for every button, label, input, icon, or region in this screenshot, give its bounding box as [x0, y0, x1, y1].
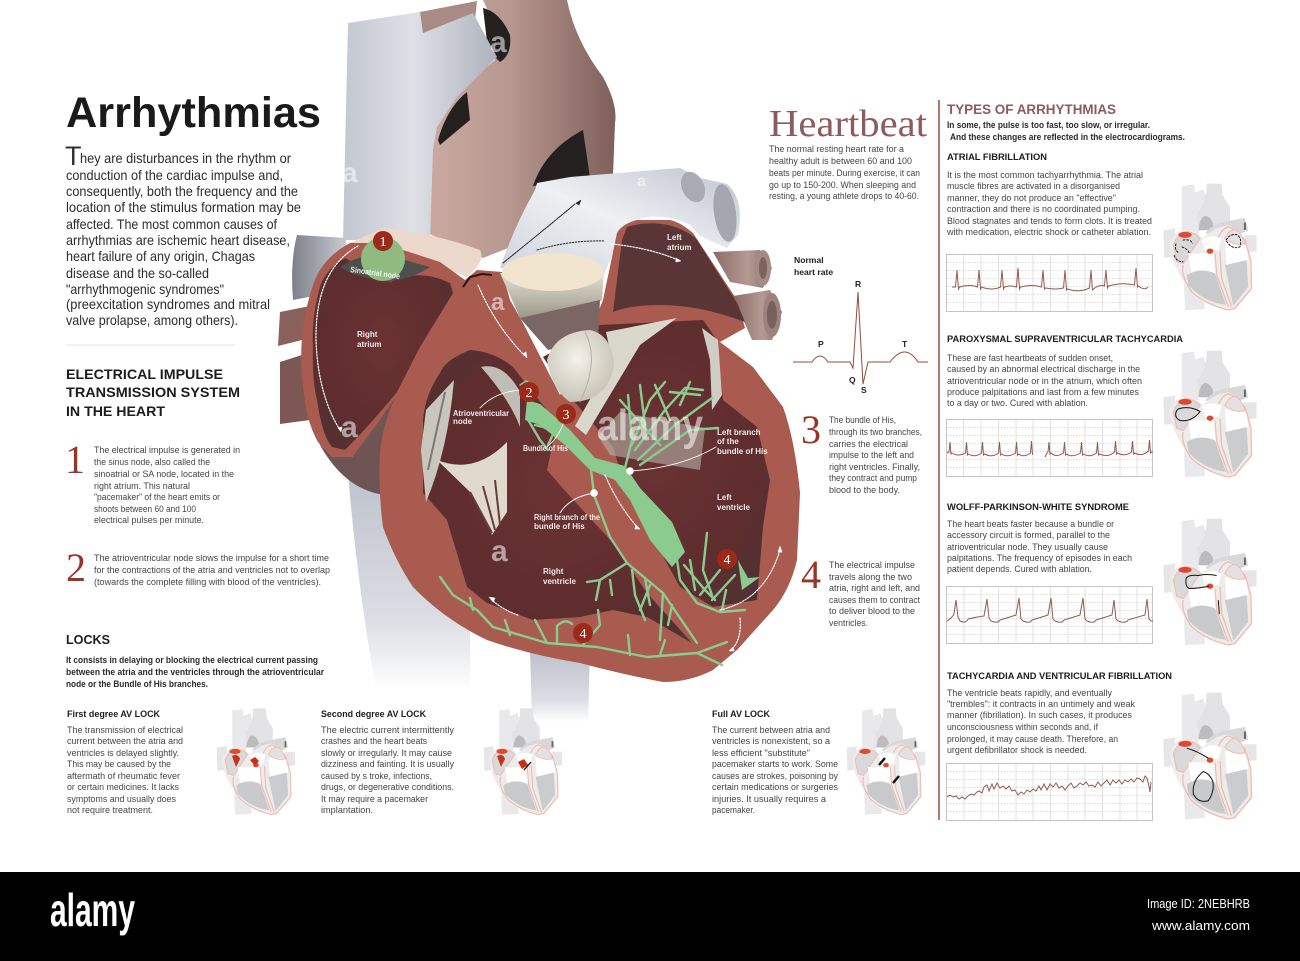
locks heading: LOCKS [66, 632, 110, 647]
heartbeat text: resting, a young athlete drops to 40-60. [769, 191, 919, 201]
right ventricle chamber [423, 350, 692, 643]
label: sinoatrial node: Sinoatrial node [350, 265, 401, 281]
intro text: consequently, both the frequency and the [66, 184, 298, 199]
step 3: through its two branches, [829, 427, 922, 437]
types intro: In some, the pulse is too fast, too slow, or irregular. [947, 120, 1150, 130]
intro text: heart failure of any origin, Chagas [66, 249, 255, 264]
step 1: "pacemaker" of the heart emits or [94, 492, 220, 502]
full AV lock: certain medications or surgeries [712, 782, 838, 792]
intro text: arrhythmias are ischemic heart disease, [66, 233, 290, 248]
heading: atrial fibrillation: ATRIAL FIBRILLATION [947, 151, 1047, 162]
chamber labels: Atrioventricular [453, 409, 509, 418]
left vessels [278, 235, 346, 424]
text: WPW: The heart beats faster because a bundle or [947, 519, 1114, 529]
chamber labels: Left branch [717, 428, 761, 437]
text: WPW: accessory circuit is formed, parallel to the [947, 530, 1110, 540]
text: atrial fibrillation: manner, they do not produce an "effective" [947, 193, 1116, 203]
watermarks: a [341, 411, 358, 444]
step 4: causes them to contract [829, 595, 920, 605]
descending aorta [530, 650, 590, 722]
text: WPW [947, 519, 1132, 574]
types intro [947, 120, 1185, 142]
second degree AV lock: drugs, or degenerative conditions. [321, 782, 454, 792]
number badges: 4 [724, 553, 730, 568]
step 3: The bundle of His, [829, 415, 896, 425]
intro text: disease and the so-called [66, 266, 209, 281]
second degree AV lock: implantation. [321, 805, 373, 815]
icon: tachycardia heart [1164, 692, 1256, 820]
step 2: The atrioventricular node slows the impulse for a short time [94, 553, 329, 563]
full AV lock: Full AV LOCK [712, 708, 770, 719]
footer bar [0, 872, 1300, 961]
LV upper pale muscle [575, 318, 722, 470]
icon: full lock heart [847, 708, 925, 815]
normal ECG chart: R [855, 279, 861, 289]
watermarks: a [342, 157, 358, 188]
heartbeat text: beats per minute. During exercise, it can [769, 168, 920, 178]
text: atrial fibrillation: with medication, electric shock or catheter ablation. [946, 227, 1151, 237]
intro text: "arrhythmogenic syndromes" [66, 282, 224, 297]
normal ECG chart: S [861, 385, 867, 395]
number badges: 2 [526, 386, 532, 401]
text: paroxysmal: caused by an abnormal electrical discharge in the [947, 364, 1140, 374]
intro text: valve prolapse, among others). [66, 313, 238, 328]
chamber labels: bundle of His [534, 522, 585, 531]
brown aorta [425, 0, 616, 258]
step 4: to deliver blood to the [829, 606, 915, 616]
heading: paroxysmal: PAROXYSMAL SUPRAVENTRICULAR TACHYCARDIA [947, 333, 1183, 344]
dark pockets [438, 8, 590, 186]
normal ECG chart: heart rate [794, 267, 833, 277]
first degree AV lock: First degree AV LOCK [67, 708, 160, 719]
chamber labels: of the [717, 437, 739, 446]
chamber labels: ventricle [543, 577, 576, 586]
pulmonary arch [500, 168, 740, 275]
watermarks: a [490, 26, 507, 59]
watermarks: a [637, 173, 646, 190]
icon: second degree heart [484, 708, 562, 815]
step 4 [801, 552, 920, 628]
watermarks: a [491, 535, 508, 568]
text: WPW: patient depends. Cured with ablation. [947, 564, 1092, 574]
first degree AV lock: ventricles is delayed slightly. [67, 748, 179, 758]
text: paroxysmal: atrioventricular node or in the atrium, which often [947, 376, 1142, 386]
title: Arrhythmias [66, 89, 321, 137]
step 1: electrical pulses per minute. [94, 515, 204, 525]
chamber labels [357, 233, 768, 586]
full AV lock: pacemaker starts to work. Some [712, 759, 838, 769]
number badges: 4 [580, 627, 586, 642]
text: atrial fibrillation: contraction and there is no coordinated pumping. [947, 204, 1140, 214]
heading: tachycardia: TACHYCARDIA AND VENTRICULAR FIBRILLATION [947, 670, 1172, 681]
image id: Image ID: 2NEBHRB [1147, 896, 1250, 911]
step 3: they contract and pump [829, 473, 917, 483]
chart: tachycardia ECG [946, 763, 1153, 821]
step 4: travels along the two [829, 572, 912, 582]
first degree AV lock: current between the atria and [67, 736, 183, 746]
chamber labels: atrium [667, 243, 691, 252]
conduction network [440, 381, 760, 665]
types heading: TYPES OF ARRHYTHMIAS [947, 102, 1116, 117]
brown patch behind vena cava [420, 1, 477, 36]
anatomical heart illustration [278, 0, 800, 722]
panel: tachycardia and ventricular fibrillation [946, 670, 1257, 821]
arrows [316, 200, 782, 651]
panel: paroxysmal supraventricular tachycardia [946, 333, 1257, 477]
alamy logo: alamy [50, 884, 135, 936]
locks intro [66, 655, 324, 689]
chamber labels: Left [667, 233, 682, 242]
intro text: (preexcitation syndromes and mitral [66, 297, 270, 312]
panel: wolff-parkinson-white [946, 501, 1257, 645]
intro text: hey are disturbances in the rhythm or [80, 151, 291, 166]
text: paroxysmal: produce palpitations and last from a few minutes [947, 387, 1139, 397]
normal ECG chart: P [818, 339, 824, 349]
full AV lock: ventricles is nonexistent, so a [712, 736, 830, 746]
text: tachycardia: manner (fibrillation). In such cases, it produces [947, 710, 1132, 720]
heading: WPW: WOLFF-PARKINSON-WHITE SYNDROME [947, 501, 1129, 512]
heading: electrical impulse: ELECTRICAL IMPULSE [66, 366, 223, 382]
icon: paroxysmal heart [1164, 350, 1256, 478]
watermarks: alamy [597, 401, 703, 450]
full AV lock: causes are strokes, poisoning by [712, 771, 838, 781]
chamber labels: atrium [357, 340, 381, 349]
text: tachycardia [947, 688, 1135, 755]
aorta section [500, 253, 604, 350]
vena cava lower [347, 460, 470, 690]
chamber labels: ventricle [717, 503, 750, 512]
step 2 [66, 545, 330, 590]
second degree AV lock: Second degree AV LOCK [321, 708, 426, 719]
step 1: The electrical impulse is generated in [94, 445, 240, 455]
first degree AV lock: aftermath of rheumatic fever [67, 771, 180, 781]
first degree AV lock: This may be caused by the [67, 759, 171, 769]
heartbeat text: healthy adult is between 60 and 100 [769, 156, 912, 166]
heartbeat text: The normal resting heart rate for a [769, 144, 904, 154]
chamber labels: node [453, 417, 473, 426]
second degree AV lock: dizziness and fainting. It is usually [321, 759, 454, 769]
step 2: 2 [66, 545, 86, 590]
locks intro: between the atria and the ventricles through the atrioventricular [66, 667, 324, 677]
step 4: ventricles. [829, 618, 868, 628]
intro text [65, 141, 301, 328]
chamber labels: Right branch of the [534, 513, 600, 522]
first degree AV lock: or certain medicines. It lacks [67, 782, 179, 792]
full AV lock: less efficient "substitute" [712, 748, 810, 758]
icon: first degree heart [217, 708, 295, 815]
step 1: sinoatrial or SA node, located in the [94, 469, 234, 479]
step 3: carries the electrical [829, 439, 908, 449]
sinoatrial node [340, 237, 430, 281]
step 3: impulse to the left and [829, 450, 914, 460]
step 3: 3 [801, 407, 821, 452]
heartbeat text [769, 144, 920, 201]
second degree AV lock: crashes and the heart beats [321, 736, 427, 746]
intro text: affected. The most common causes of [66, 217, 277, 232]
step 2: for the contractions of the atria and ventricles not to overlap [94, 565, 330, 575]
intro text: T [65, 141, 82, 171]
full AV lock [712, 708, 838, 815]
second degree AV lock: caused by s troke, infections, [321, 771, 432, 781]
text: WPW: palpitations. The frequency of episodes in each [947, 553, 1132, 563]
dark mark [463, 274, 492, 287]
intro text: conduction of the cardiac impulse and, [66, 168, 283, 183]
chamber labels: Right [357, 330, 378, 339]
step 1: 1 [65, 437, 85, 482]
icon: WPW heart [1164, 518, 1256, 646]
text: tachycardia: "trembles": it contracts in an untimely and weak [947, 699, 1135, 709]
text: atrial fibrillation: It is the most common tachyarrhythmia. The atrial [947, 170, 1143, 180]
second degree AV lock: slowly or irregularly. It may cause [321, 748, 452, 758]
second degree AV lock [321, 708, 455, 815]
icon: atrial fibrillation heart [1164, 184, 1256, 311]
step 3: blood to the body. [829, 485, 900, 495]
first degree AV lock: not require treatment. [67, 805, 153, 815]
heading: electrical impulse [66, 366, 240, 419]
chamber labels: Bundle of His [523, 444, 568, 453]
full AV lock: injuries. It usually requires a [712, 794, 826, 804]
text: tachycardia: The ventricle beats rapidly, and eventually [947, 688, 1112, 698]
second degree AV lock: It may require a pacemaker [321, 794, 428, 804]
heading: electrical impulse: IN THE HEART [66, 403, 165, 419]
step 4: 4 [801, 552, 821, 597]
text: atrial fibrillation: muscle fibres are activated in a disorganised [947, 181, 1120, 191]
right ventricle valve leaflets [421, 366, 520, 535]
step 2: (towards the complete filling with blood of the ventricles). [94, 577, 321, 587]
image id [1147, 896, 1250, 933]
text: tachycardia: urgent defibrillator shock is needed. [947, 745, 1087, 755]
locks intro: It consists in delaying or blocking the electrical current passing [66, 655, 318, 665]
heartbeat heading: Heartbeat [769, 103, 927, 145]
chamber labels: bundle of His [717, 447, 768, 456]
atrium pale roof [350, 228, 481, 277]
watermarks: a [491, 289, 505, 316]
chamber labels: Right [543, 567, 564, 576]
step 3: right ventricles. Finally, [829, 462, 920, 472]
watermarks [341, 26, 703, 568]
full AV lock: The current between atria and [712, 725, 830, 735]
image id: www.alamy.com [1151, 918, 1250, 933]
normal ECG chart [793, 255, 928, 395]
number badges: 3 [562, 408, 570, 423]
step 1: shoots between 60 and 100 [94, 504, 196, 514]
first degree AV lock [67, 708, 183, 815]
text: paroxysmal: These are fast heartbeats of sudden onset, [947, 353, 1113, 363]
chart: paroxysmal ECG [946, 419, 1153, 477]
right atrium chamber [313, 258, 453, 450]
first degree AV lock: The transmission of electrical [67, 725, 183, 735]
text: paroxysmal [947, 353, 1142, 408]
step 1: right atrium. This natural [94, 481, 190, 491]
chamber labels: Left [717, 493, 732, 502]
number badges [373, 231, 737, 643]
locks intro: node or the Bundle of His branches. [66, 679, 208, 689]
callout dots [590, 467, 634, 497]
chart: WPW ECG [946, 586, 1153, 644]
vena cava upper [343, 12, 497, 240]
step 3 [801, 407, 922, 495]
chart: atrial fibrillation ECG [946, 254, 1153, 312]
heartbeat text: go up to 150-200. When sleeping and [769, 180, 916, 190]
types intro: And these changes are reflected in the electrocardiograms. [950, 132, 1185, 142]
text: atrial fibrillation [946, 170, 1152, 237]
heading: electrical impulse: TRANSMISSION SYSTEM [66, 384, 240, 400]
step 1: the sinus node, also called the [94, 457, 210, 467]
intro text: location of the stimulus formation may be [66, 200, 301, 215]
step 1 [65, 437, 240, 525]
normal ECG chart: Normal [794, 255, 824, 265]
heart muscle wall [301, 220, 800, 682]
left ventricle chamber [543, 320, 770, 607]
step 4: The electrical impulse [829, 560, 915, 570]
normal ECG chart: T [902, 339, 908, 349]
text: WPW: atrioventricular node. They usually cause [947, 542, 1108, 552]
left atrium chamber [613, 223, 745, 322]
right vessels [713, 250, 782, 340]
right atrium underside [303, 372, 400, 495]
step 4: atria, right and left, and [829, 583, 920, 593]
number badges: 1 [380, 235, 386, 250]
normal ECG chart: Q [849, 375, 856, 385]
text: tachycardia: prolonged, it may cause death. Therefore, an [947, 734, 1118, 744]
text: tachycardia: unconsciousness within seconds and, if [947, 722, 1098, 732]
aortic valve cusps [547, 330, 614, 402]
text: atrial fibrillation: Blood stagnates and tends to form clots. It is treated [947, 216, 1152, 226]
full AV lock: pacemaker. [712, 805, 755, 815]
panel: atrial fibrillation [946, 151, 1257, 312]
text: paroxysmal: to a day or two. Cured with ablation. [947, 398, 1088, 408]
second degree AV lock: The electric current intermittently [321, 725, 455, 735]
first degree AV lock: symptoms and usually does [67, 794, 176, 804]
